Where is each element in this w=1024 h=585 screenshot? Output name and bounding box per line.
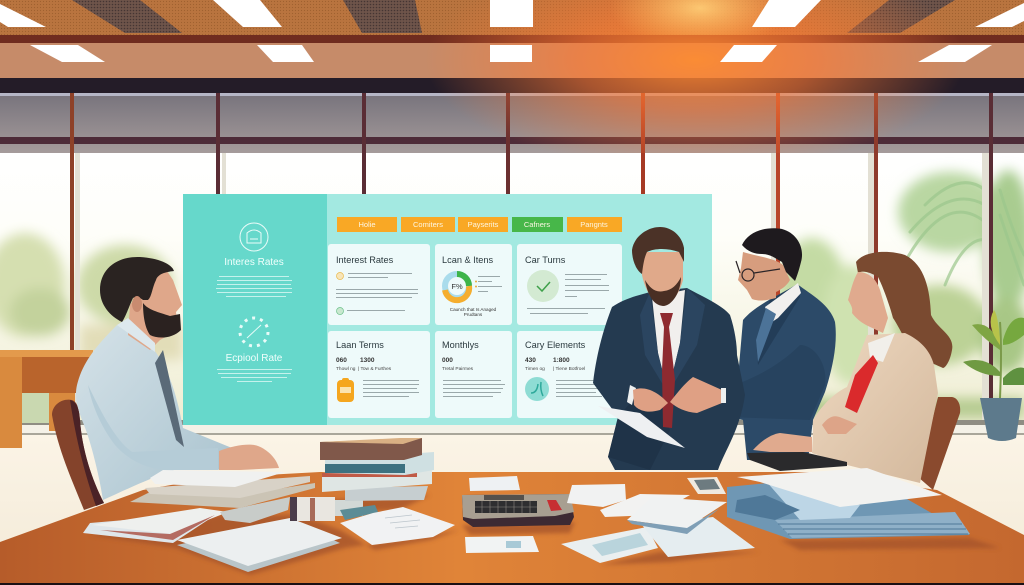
book stack: [320, 438, 434, 501]
card: cary elements: Timen og: [525, 366, 545, 372]
screen sidebar: Ecpiool Rate: [226, 353, 283, 364]
open book: [177, 518, 342, 572]
shirt: [765, 283, 801, 322]
tab buttons: [337, 217, 622, 232]
face: [642, 252, 683, 305]
card: cary elements: 1:800: [553, 357, 570, 364]
donut chart: [445, 274, 469, 300]
card: monthlys: Tretal Pairmes: [442, 366, 474, 372]
lapel shade: [756, 285, 800, 365]
card: loan and items with donut chart: [435, 244, 512, 325]
card: cary elements: | Tiene Botfroel: [553, 366, 585, 372]
icon: orange bag: [337, 378, 354, 402]
tab buttons: Pangnts: [580, 220, 608, 229]
table shadows: [90, 495, 1000, 575]
black notebook: [747, 452, 847, 471]
sun glow: [380, 0, 1024, 153]
arm: [725, 345, 825, 420]
person: man in centre: [593, 227, 745, 470]
person: man left in shirt: [52, 257, 279, 510]
tab buttons: Cafners: [524, 220, 550, 229]
floor: [0, 435, 1024, 565]
blouse: [845, 355, 878, 413]
screen sidebar: Interes Rates: [224, 257, 284, 268]
hands: [753, 433, 812, 452]
scattered papers: [340, 476, 755, 563]
palm fronds: [905, 183, 1024, 285]
table: [0, 472, 1024, 585]
hair: [856, 252, 952, 368]
collar: [868, 333, 895, 362]
person: woman in beige jacket: [753, 252, 960, 490]
suit: [593, 288, 745, 470]
binder row: [290, 497, 378, 521]
jacket lower shade: [608, 392, 670, 470]
ceiling: [0, 0, 1024, 78]
side desk: [0, 350, 93, 448]
card: loan and items with donut chart: Lcan & Itens: [442, 255, 493, 265]
torso: [76, 325, 232, 500]
tie: [155, 350, 184, 447]
suit: [723, 284, 836, 460]
card: loan and items with donut chart: Caunch that Is Anaged: [450, 307, 497, 312]
card: monthlys: Monthlys: [442, 340, 479, 350]
card: loan and items with donut chart: Prudtans: [464, 312, 483, 317]
card: interest rates: [328, 244, 430, 325]
calculator: [462, 494, 574, 527]
ceiling lights: [0, 0, 1024, 62]
icon: rate circle: [240, 223, 268, 251]
plant: [963, 310, 1024, 441]
window crossbar: [0, 137, 1024, 144]
card: car terms: Car Turns: [525, 255, 566, 265]
pot: [980, 398, 1022, 441]
card: monthlys: [435, 331, 512, 418]
phone: [687, 477, 726, 494]
neck and head: [128, 268, 182, 350]
card: loan terms: 1300: [360, 357, 375, 364]
plant leaves: [963, 310, 1024, 398]
face: [738, 252, 790, 301]
held paper: [598, 406, 685, 448]
card: loan terms: Thowl ng: [336, 366, 356, 372]
card: cary elements: [517, 331, 622, 418]
screen sidebar: [183, 194, 327, 425]
card: car terms: [517, 244, 622, 325]
right document pile: [727, 468, 970, 539]
card: loan terms: 060: [336, 357, 347, 364]
card: monthlys: 000: [442, 357, 453, 364]
hand: [219, 445, 279, 470]
shirt cuff: [627, 385, 636, 405]
tab buttons: Payserits: [468, 220, 499, 229]
tie: [660, 313, 675, 428]
card: interest rates: Interest Rates: [336, 255, 394, 265]
icon: star ring: [240, 318, 268, 346]
jacket: [812, 333, 938, 483]
card: cary elements: Cary Elements: [525, 340, 586, 350]
chair: [918, 397, 960, 490]
hands: [633, 388, 668, 412]
person: man with glasses: [723, 228, 836, 460]
glasses: [736, 261, 780, 281]
window wall: [0, 78, 1024, 435]
lapels: [640, 292, 668, 393]
hair: [742, 228, 802, 281]
tab buttons: Comiters: [413, 220, 443, 229]
tie: [756, 308, 776, 362]
shirt arm shade: [88, 385, 218, 470]
card: loan terms: Laan Terms: [336, 340, 384, 350]
card: cary elements: 430: [525, 357, 536, 364]
card: loan terms: | Tow & Furthes: [358, 366, 392, 372]
card: loan terms: [328, 331, 430, 418]
tab buttons: Holie: [358, 220, 376, 229]
presentation screen: [183, 194, 712, 425]
left document pile: [83, 470, 315, 543]
chair: [52, 400, 104, 510]
card: loan and items with donut chart: F%: [451, 282, 463, 291]
face: [848, 272, 888, 333]
shirt: [652, 290, 685, 393]
trees outside: [0, 170, 1024, 418]
